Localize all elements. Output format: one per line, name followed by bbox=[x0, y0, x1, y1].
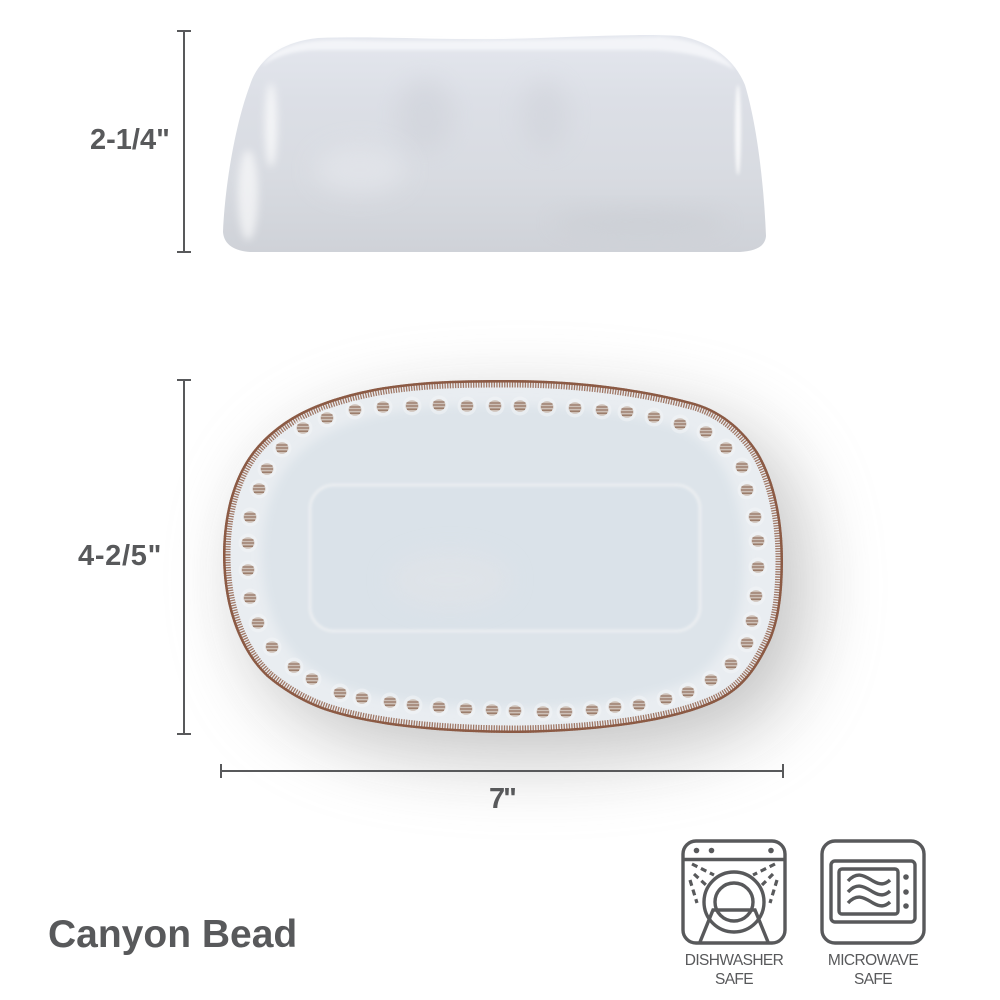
dimension: plate width bbox=[221, 764, 783, 815]
label: microwave safe bbox=[828, 952, 918, 988]
dimension: lid height bbox=[90, 31, 191, 252]
label: dishwasher safe bbox=[685, 952, 784, 988]
title: product name: Canyon Bead bbox=[48, 913, 297, 956]
product: butter dish lid bbox=[223, 35, 766, 252]
plate centre panel bbox=[310, 485, 700, 631]
label: microwave safe: MICROWAVE bbox=[828, 952, 918, 969]
icon: dishwasher safe bbox=[683, 841, 785, 943]
product: butter dish plate bbox=[223, 380, 783, 733]
brown rim bbox=[223, 380, 783, 733]
shadow: plate bbox=[245, 404, 805, 757]
bead ring bbox=[238, 396, 768, 722]
label: dishwasher safe: SAFE bbox=[715, 971, 753, 988]
dimension: plate width: 7" bbox=[489, 783, 515, 815]
icon: microwave safe bbox=[822, 841, 924, 943]
dimension: lid height: 2-1/4" bbox=[90, 124, 170, 156]
dimension: plate height bbox=[78, 380, 191, 734]
plate well bbox=[262, 405, 744, 708]
dimension: plate height: 4-2/5" bbox=[78, 540, 162, 572]
label: microwave safe: SAFE bbox=[854, 971, 892, 988]
label: dishwasher safe: DISHWASHER bbox=[685, 952, 784, 969]
